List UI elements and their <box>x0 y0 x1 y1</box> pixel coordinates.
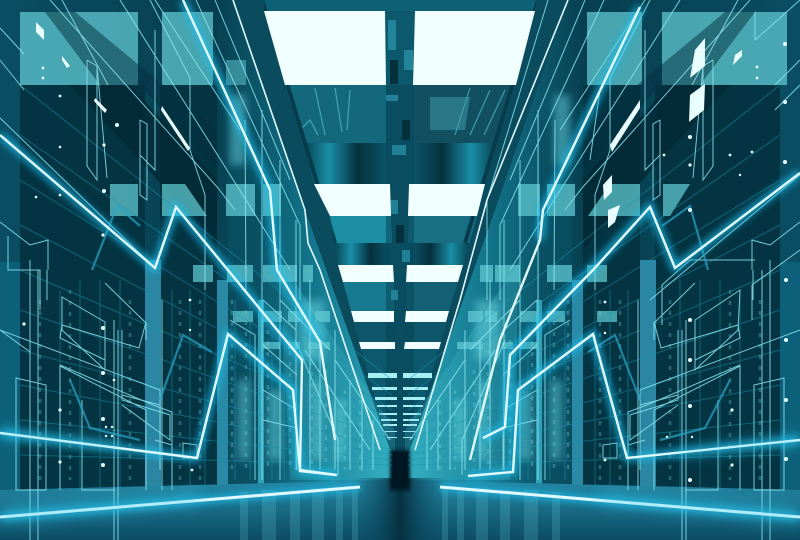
left server wall <box>0 0 395 490</box>
neon outer glow along edges <box>0 425 800 525</box>
thin circuit lines left <box>0 0 390 540</box>
glowing status dots <box>22 42 788 482</box>
dark diagonal overlays on panels <box>45 12 755 170</box>
right server wall <box>405 0 800 490</box>
dimmer blue zigzags <box>70 206 730 440</box>
bright rectangular accents <box>36 22 742 228</box>
hazy light clusters near corridor centre <box>230 95 570 460</box>
ceiling light panels <box>264 11 535 438</box>
floor <box>0 450 800 540</box>
thin circuit lines right <box>410 0 800 540</box>
server rack detail lines <box>20 85 780 490</box>
translucent glowing panels <box>20 12 787 349</box>
ceiling <box>232 0 568 460</box>
server LED texture <box>40 290 760 480</box>
